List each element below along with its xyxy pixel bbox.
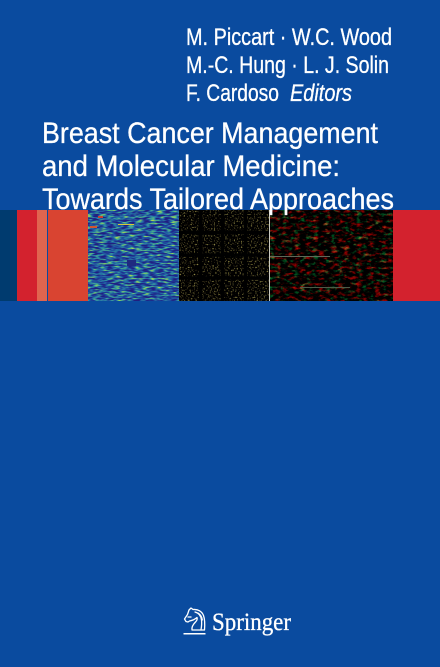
publisher logo: [184, 608, 292, 636]
band: orange-red segment: [48, 210, 88, 301]
band: salmon segment: [37, 210, 47, 301]
band: red segment: [17, 210, 37, 301]
editor line 2: M.-C. Hung · L. J. Solin: [186, 52, 389, 79]
colour band: [0, 210, 440, 301]
editor line 3: F. Cardoso: [186, 80, 279, 107]
band: red-green heat map: [270, 210, 393, 301]
editors label: Editors: [290, 80, 352, 107]
band: white divider: [269, 210, 270, 301]
title line 3: Towards Tailored Approaches: [42, 183, 394, 216]
editor line 1: M. Piccart · W.C. Wood: [186, 24, 392, 51]
publisher name: Springer: [212, 609, 292, 636]
band: microarray grid: [179, 210, 269, 301]
title line 1: Breast Cancer Management: [42, 117, 379, 150]
band: right red segment: [393, 210, 440, 301]
title: [42, 117, 394, 216]
editors: [186, 24, 392, 107]
title line 2: and Molecular Medicine:: [42, 150, 340, 183]
band: blue heat map: [88, 210, 179, 301]
band: dark blue segment: [0, 210, 17, 301]
icon: chess knight: [184, 608, 206, 634]
